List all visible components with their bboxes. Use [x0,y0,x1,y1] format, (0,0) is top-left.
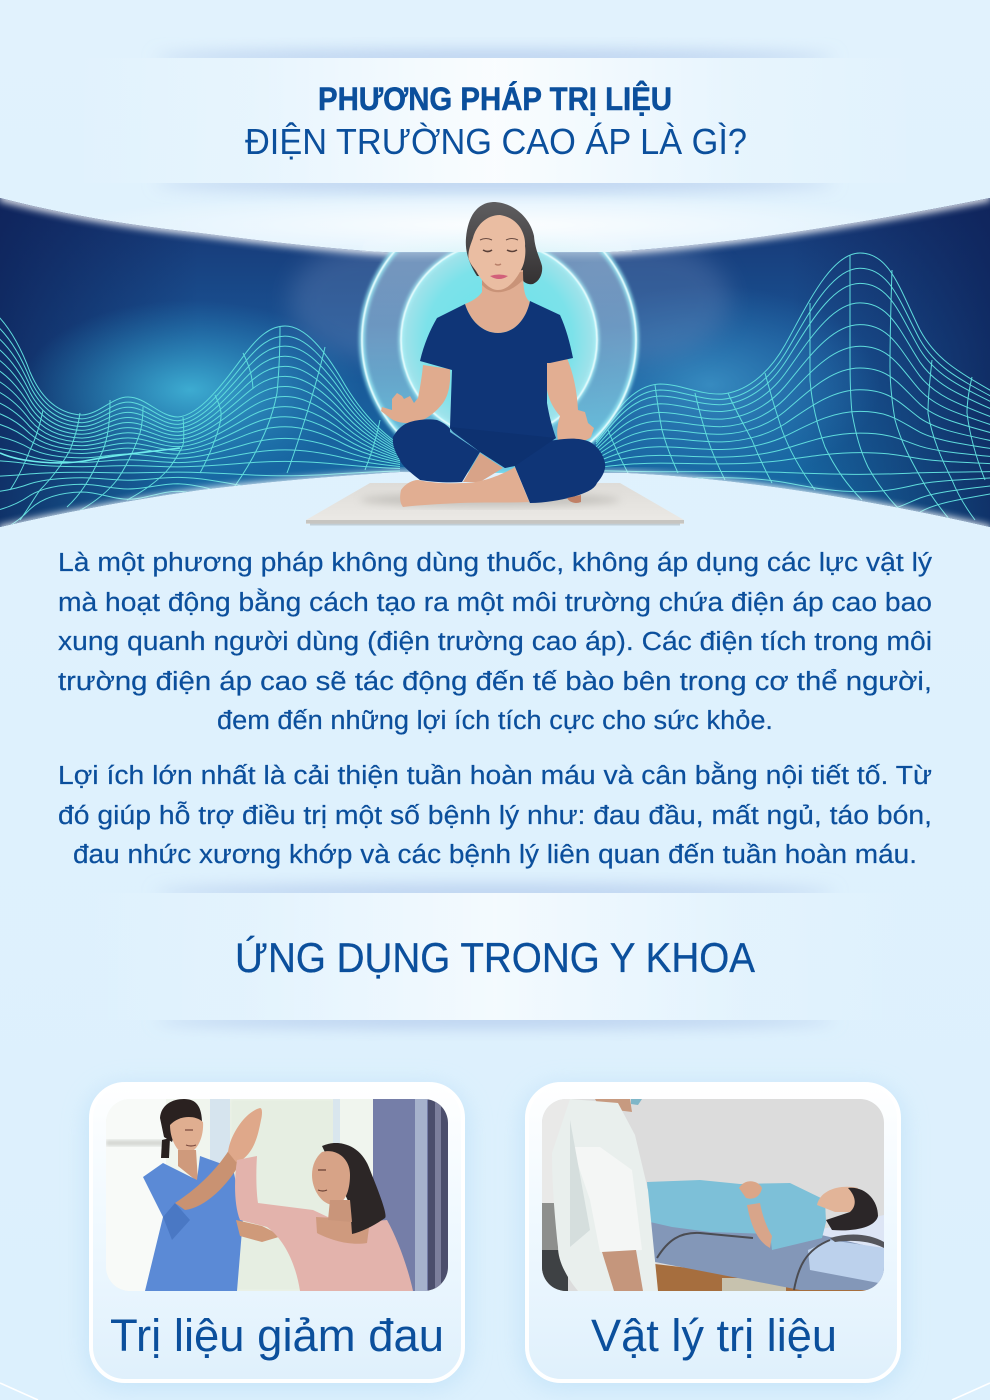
curtain [373,1099,429,1291]
card label: Trị liệu giảm đau [110,1310,444,1361]
section band: applications [172,880,818,1034]
photo: nurse assisting patient [106,1099,448,1291]
body paragraph 2 [58,761,932,869]
left wireframe wave [0,312,400,533]
soft white fade along bottom edge [0,478,990,533]
card: physical therapy [522,1084,904,1388]
left arm and hand [381,365,450,423]
body paragraph 1: xung quanh người dùng (điện trường cao áp). Các điện tích trong môi [58,628,932,656]
energy rings [357,252,641,473]
shirt [420,301,573,468]
hair [466,202,542,284]
doctor [595,1099,632,1112]
patient [235,1156,413,1291]
face [468,215,525,290]
heading line 1: PHƯƠNG PHÁP TRỊ LIỆU [318,81,672,117]
feet and shins [463,453,503,482]
body paragraph 2: đó giúp hỗ trợ điều trị một số bệnh lý như: đau đầu, mất ngủ, táo bón, [58,801,932,830]
heading line 2: ĐIỆN TRƯỜNG CAO ÁP LÀ GÌ? [245,121,747,162]
body paragraph 1: đem đến những lợi ích tích cực cho sức khỏe. [217,707,773,735]
body paragraph 2: đau nhức xương khớp và các bệnh lý liên quan đến tuần hoàn máu. [73,841,917,869]
soft white fade along top edge [0,196,990,251]
card: pain relief therapy [86,1084,468,1388]
glow above the head [362,250,632,252]
neck and chest [465,270,530,333]
body paragraph 1: Là một phương pháp không dùng thuốc, không áp dụng các lực vật lý [58,549,932,577]
pillow [822,1215,884,1248]
meditating woman [381,202,605,507]
title band [169,44,821,197]
yoga mat [306,483,684,526]
right arm and hand [547,358,594,443]
legs [393,419,605,503]
section heading: ỨNG DỤNG TRONG Y KHOA [235,934,755,981]
body paragraph 1 [58,549,932,735]
wooden bed base [655,1264,884,1291]
patient [647,1180,826,1250]
photo: patient lying on therapy mat [542,1099,884,1291]
hero dark wave background [0,190,990,535]
body paragraph 1: trường điện áp cao sẽ tác động đến tế bào bên trong cơ thể người, [58,668,932,696]
bed sheet [650,1222,884,1290]
right wireframe wave [596,253,990,535]
body paragraph 2: Lợi ích lớn nhất là cải thiện tuần hoàn máu và cân bằng nội tiết tố. Từ [58,761,932,790]
nurse [161,1138,170,1158]
card label: Vật lý trị liệu [591,1310,837,1361]
body paragraph 1: mà hoạt động bằng cách tạo ra một môi trường chứa điện áp cao bao [58,588,932,617]
